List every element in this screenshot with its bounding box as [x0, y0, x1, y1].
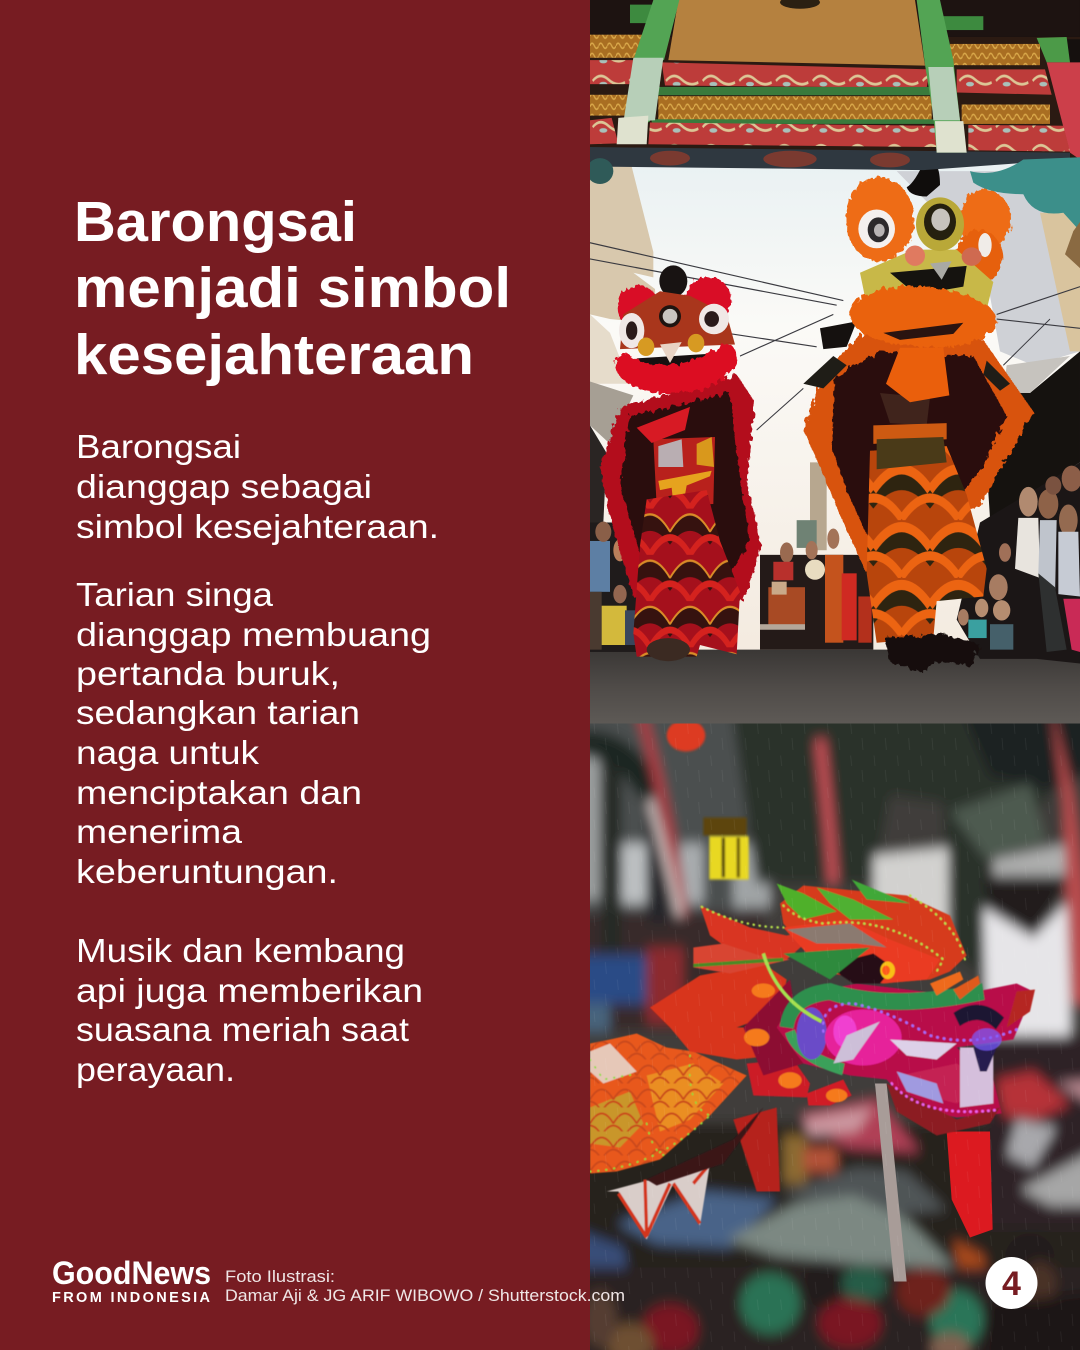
text block: paragraph 2: menerima — [76, 813, 243, 850]
orange lion beard — [886, 348, 949, 402]
text block: paragraph 2: menciptakan dan — [76, 774, 362, 811]
orange lion shoulder patches — [803, 321, 1010, 444]
photo credit: Damar Aji & JG ARIF WIBOWO / Shutterstock.com — [225, 1286, 625, 1305]
text block: paragraph 1: simbol kesejahteraan. — [76, 508, 439, 545]
rain overlay — [590, 724, 1080, 1350]
title: menjadi simbol — [74, 256, 511, 320]
logo: GoodNews from Indonesia: FROM INDONESIA — [52, 1290, 211, 1306]
road — [590, 650, 1080, 725]
gate ornament — [970, 157, 1080, 231]
text block: paragraph 3: api juga memberikan — [76, 972, 423, 1009]
red lion foot — [647, 638, 690, 661]
dragon body — [590, 964, 852, 1186]
text block: paragraph 2: dianggap membuang — [76, 616, 431, 653]
dragon crest — [693, 880, 967, 1022]
red lion body — [600, 375, 762, 601]
red lion scaled skirt — [633, 490, 740, 657]
text block: paragraph 1: Barongsai — [76, 428, 241, 465]
text block: paragraph 1: dianggap sebagai — [76, 468, 372, 505]
red lion head — [614, 265, 737, 443]
dragon pole — [875, 1084, 907, 1282]
orange lion head — [846, 159, 1011, 348]
text block: paragraph 2: keberuntungan. — [76, 853, 338, 890]
text block: paragraph 3: perayaan. — [76, 1051, 235, 1088]
dragon head — [777, 972, 1035, 1136]
text block: paragraph 2: Tarian singa — [76, 576, 274, 613]
base tone — [590, 724, 1080, 1350]
photo credit — [225, 1267, 625, 1305]
text block: paragraph 2: naga untuk — [76, 734, 260, 771]
text block: paragraph 3: Musik dan kembang — [76, 932, 405, 969]
logo: GoodNews from Indonesia: GoodNews — [52, 1255, 211, 1291]
blurred background — [570, 700, 1080, 1350]
title: kesejahteraan — [74, 323, 474, 387]
dragon tassel — [947, 1132, 993, 1238]
gate ornament detail — [1065, 222, 1080, 268]
left buildings — [590, 166, 657, 522]
red lantern — [667, 720, 705, 752]
musicians group — [760, 528, 873, 650]
page number badge — [986, 1257, 1038, 1309]
text block: paragraph 2: pertanda buruk, — [76, 655, 340, 692]
left crowd — [590, 522, 636, 652]
text block: paragraph 2 — [76, 576, 431, 890]
dragon tail fringe — [607, 1108, 780, 1240]
red lion chest and sash — [653, 437, 715, 506]
overhead wires — [590, 243, 1080, 430]
far street buildings — [797, 462, 827, 550]
text block: paragraph 3: suasana meriah saat — [76, 1011, 409, 1048]
right buildings — [897, 171, 1080, 518]
panel: maroon background — [0, 0, 590, 1350]
logo: GoodNews from Indonesia — [52, 1255, 211, 1306]
title: Barongsai — [74, 190, 357, 254]
right crowd — [957, 462, 1080, 664]
gate structure — [587, 0, 1080, 184]
title — [74, 190, 511, 387]
photo credit: Foto Ilustrasi: — [225, 1267, 335, 1286]
orange lion feet — [885, 633, 980, 673]
orange lion body — [803, 333, 1033, 573]
photo: LED dragon in the rain — [570, 700, 1080, 1350]
photo: lion dance under the gate — [587, 0, 1080, 725]
text block: paragraph 2: sedangkan tarian — [76, 694, 360, 731]
yellow lantern — [703, 818, 749, 880]
orange lion — [803, 159, 1033, 673]
text block: paragraph 3 — [76, 932, 423, 1088]
text block: paragraph 1 — [76, 428, 439, 545]
page number badge: 4 — [1002, 1265, 1021, 1303]
red lion — [600, 265, 762, 661]
orange lion scaled skirt — [867, 446, 987, 643]
